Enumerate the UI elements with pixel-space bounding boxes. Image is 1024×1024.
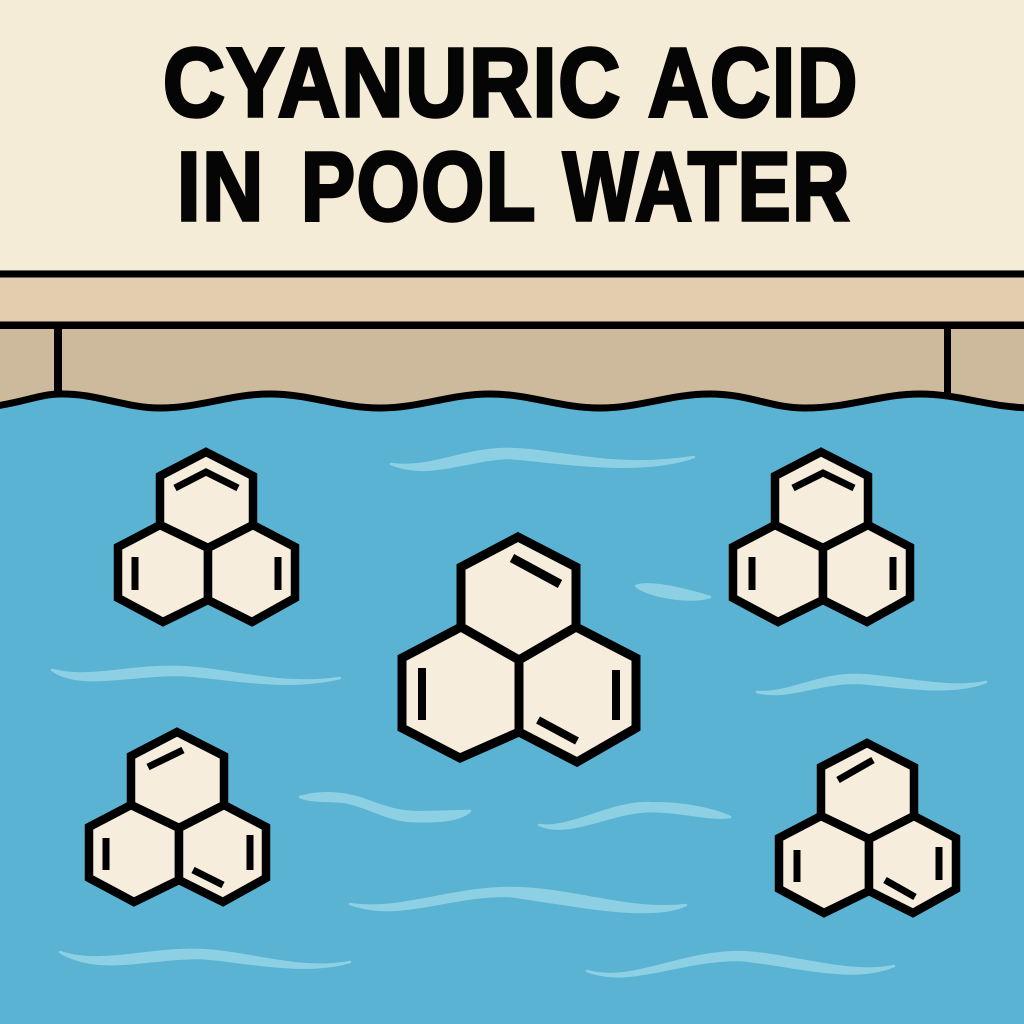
- title: ACID: [648, 28, 859, 137]
- title: POOL: [301, 132, 537, 241]
- pool coping: [0, 270, 1024, 329]
- pool tile wall: [0, 329, 1024, 414]
- title: CYANURIC: [163, 28, 622, 137]
- molecule: lower right: [779, 743, 956, 913]
- molecule: top right: [733, 452, 910, 622]
- title: [163, 28, 859, 241]
- pool water: [0, 394, 1024, 1024]
- title: WATER: [563, 132, 851, 241]
- water ripples: [52, 449, 986, 976]
- molecule: center large: [402, 537, 636, 762]
- title: IN: [177, 132, 265, 241]
- header background: [0, 0, 1024, 270]
- molecule: top left: [118, 452, 295, 622]
- molecule: lower left: [89, 732, 266, 902]
